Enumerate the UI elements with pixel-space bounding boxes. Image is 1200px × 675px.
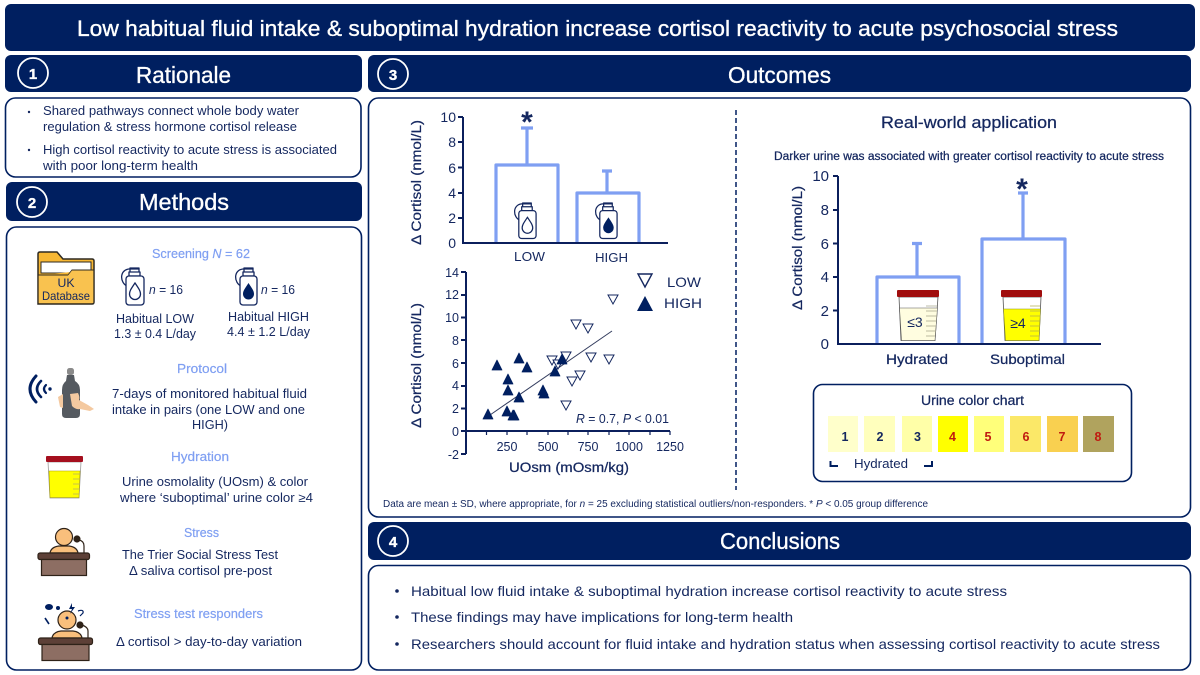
text block: shared pathways: Shared pathways connect whole body water [43, 104, 299, 118]
bar: high [577, 171, 639, 243]
axis title: Δ Cortisol (nmol/L) [408, 120, 424, 245]
icon: person at podium [38, 528, 90, 576]
heading: protocol: Protocol [177, 362, 227, 376]
heading: responders: Stress test responders [134, 607, 263, 621]
icon: UK database folder: Database [42, 289, 90, 303]
text block: responders: Δ cortisol > day-to-day variation [116, 635, 302, 649]
scatter plot: cortisol vs urine osmolality: 250 [497, 440, 517, 454]
significance star: * [1016, 173, 1028, 206]
label: habitual high: 4.4 ± 1.2 L/day [227, 325, 311, 339]
panel: methods heading: 2 [28, 195, 36, 212]
text block: shared pathways [28, 104, 299, 134]
text block: high cortisol reactivity [28, 143, 337, 173]
panel: conclusions heading: Conclusions [720, 528, 840, 554]
label: habitual low [114, 312, 197, 341]
bar chart: cortisol by fluid intake [408, 106, 668, 265]
scatter plot: cortisol vs urine osmolality: 12 [445, 288, 459, 302]
scatter plot: cortisol vs urine osmolality [408, 266, 702, 475]
bar chart: cortisol by hydration [789, 168, 1101, 367]
scatter plot: cortisol vs urine osmolality: 8 [452, 334, 459, 348]
bar chart: cortisol by hydration: 6 [821, 236, 829, 253]
bar chart: cortisol by fluid intake: 8 [448, 134, 456, 150]
swatch numbers: 3 [914, 430, 921, 444]
text block: stress [122, 548, 279, 578]
footnote: Data are mean ± SD, where appropriate, for n = 25 excluding statistical outliers/non-responders. * P < 0.05 group difference [383, 499, 928, 510]
icon: smart bottle with hand [58, 368, 94, 418]
bar: low [496, 128, 558, 243]
panel: outcomes heading [368, 55, 1191, 92]
heading: stress: Stress [184, 526, 219, 540]
category labels: LOW [514, 249, 546, 264]
swatch numbers: 2 [877, 430, 884, 444]
label: n high: n = 16 [261, 283, 295, 297]
scatter plot: cortisol vs urine osmolality: 2 [452, 402, 459, 416]
urine color chart [814, 384, 1132, 482]
text block: high cortisol reactivity: with poor long-term health [42, 159, 198, 173]
swatch numbers: 4 [949, 430, 956, 444]
swatch numbers: 8 [1095, 430, 1102, 444]
subheading: Darker urine was associated with greater cortisol reactivity to acute stress [774, 151, 1164, 163]
panel: rationale [6, 98, 361, 177]
icon: bottle high [596, 203, 617, 238]
category labels [514, 249, 628, 265]
bar: suboptimal [982, 193, 1065, 344]
title: Low habitual fluid intake & suboptimal hydration increase cortisol reactivity to acute psychosocial stress [77, 16, 1118, 41]
icon: stressed person at podium [38, 603, 92, 660]
bar chart: cortisol by hydration: 10 [812, 168, 829, 185]
color swatches [828, 416, 1114, 452]
text block: hydration: Urine osmolality (UOsm) & color [122, 475, 308, 489]
scatter plot: cortisol vs urine osmolality: 1000 [615, 440, 643, 454]
bar chart: cortisol by hydration: 8 [821, 202, 829, 219]
points: low [547, 295, 618, 410]
hydrated bracket: Hydrated [854, 456, 908, 471]
scatter plot: cortisol vs urine osmolality: 4 [452, 379, 459, 393]
category labels [886, 351, 1065, 367]
panel: rationale heading [5, 55, 362, 92]
icon: urine cup suboptimal: ≥4 [1010, 315, 1026, 331]
label: n low: n = 16 [149, 283, 183, 297]
swatch numbers: 6 [1023, 430, 1030, 444]
panel: methods heading [6, 182, 362, 221]
scatter plot: cortisol vs urine osmolality: -2 [448, 448, 459, 462]
axis title: UOsm (mOsm/kg) [509, 459, 629, 475]
text block: protocol: 7-days of monitored habitual fluid [112, 387, 307, 401]
title [5, 4, 1195, 51]
label: habitual low: 1.3 ± 0.4 L/day [114, 327, 197, 341]
heading: real-world application: Real-world application [881, 114, 1057, 132]
chart title: Urine color chart [921, 393, 1024, 408]
icon: UK database folder [38, 252, 94, 304]
bar chart: cortisol by hydration: 0 [821, 336, 829, 353]
heading: screening: Screening N = 62 [152, 247, 250, 261]
icon: bottle low [122, 268, 144, 305]
text block: high cortisol reactivity: High cortisol reactivity to acute stress is associated [43, 143, 337, 157]
panel: methods [6, 227, 362, 670]
text block: stress: The Trier Social Stress Test [122, 548, 279, 562]
conclusion 1: Habitual low fluid intake & suboptimal hydration increase cortisol reactivity to acute stress [411, 583, 1007, 599]
icon: urine cup hydrated [897, 290, 939, 340]
bar chart: cortisol by fluid intake: 10 [440, 109, 456, 125]
scatter plot: cortisol vs urine osmolality: 500 [538, 440, 558, 454]
panel: conclusions heading: 4 [389, 534, 398, 551]
scatter plot: cortisol vs urine osmolality: 6 [452, 357, 459, 371]
legend: LOW [667, 274, 702, 290]
text block: hydration: where ‘suboptimal’ urine color ≥4 [119, 491, 313, 505]
swatch numbers: 5 [985, 430, 992, 444]
axis title: Δ Cortisol (nmol/L) [789, 186, 805, 310]
text block: hydration [119, 475, 313, 505]
panel: conclusions heading [368, 522, 1191, 560]
text block: protocol: HIGH) [192, 418, 228, 432]
statistic: R = 0.7, P < 0.01 [576, 412, 669, 426]
bar chart: cortisol by fluid intake: 6 [448, 160, 456, 176]
bar chart: cortisol by fluid intake: 2 [448, 210, 456, 226]
bar chart: cortisol by fluid intake: 4 [448, 185, 456, 201]
bar: hydrated [877, 243, 959, 344]
swatch numbers: 7 [1059, 430, 1066, 444]
scatter plot: cortisol vs urine osmolality: 1250 [656, 440, 684, 454]
category labels: Suboptimal [990, 351, 1065, 367]
category labels: Hydrated [886, 351, 948, 367]
panel: outcomes [368, 98, 1190, 517]
icon: urine cup suboptimal [1001, 290, 1042, 340]
icon: UK database folder: UK [58, 276, 74, 290]
panel: conclusions [368, 566, 1190, 670]
heading: hydration: Hydration [171, 450, 229, 464]
swatch numbers [842, 430, 1102, 444]
icon: wireless signal [30, 376, 51, 402]
icon: bottle low [515, 203, 536, 238]
text block: protocol [112, 387, 307, 432]
text block: protocol: intake in pairs (one LOW and one [112, 403, 305, 417]
text block: shared pathways: regulation & stress hormone cortisol release [43, 120, 297, 134]
panel: rationale heading: Rationale [136, 62, 231, 88]
scatter plot: cortisol vs urine osmolality: 750 [578, 440, 598, 454]
swatch numbers: 1 [842, 430, 849, 444]
icon: urine cup yellow [46, 456, 83, 498]
hydrated bracket [830, 456, 932, 471]
bar chart: cortisol by hydration: 2 [821, 303, 829, 320]
label: habitual high: Habitual HIGH [228, 310, 309, 324]
panel: outcomes heading: Outcomes [728, 62, 831, 88]
panel: rationale heading: 1 [29, 66, 37, 83]
regression line [490, 331, 612, 415]
significance star: * [521, 106, 533, 139]
label: habitual high [227, 310, 311, 339]
icon: bottle high [236, 268, 257, 305]
panel: methods heading: Methods [139, 189, 229, 215]
points: high [483, 353, 567, 420]
axis title: Δ Cortisol (nmol/L) [408, 303, 424, 428]
scatter plot: cortisol vs urine osmolality: 10 [445, 311, 459, 325]
bar chart: cortisol by fluid intake: 0 [448, 235, 456, 251]
scatter plot: cortisol vs urine osmolality: 14 [445, 266, 459, 280]
scatter plot: cortisol vs urine osmolality: 0 [452, 425, 459, 439]
legend: HIGH [664, 295, 702, 311]
text block: stress: Δ saliva cortisol pre-post [129, 564, 273, 578]
category labels: HIGH [595, 250, 628, 265]
label: habitual low: Habitual LOW [116, 312, 194, 326]
legend [637, 274, 702, 311]
bar chart: cortisol by hydration: 4 [821, 269, 829, 286]
conclusion 2: These findings may have implications for long-term health [411, 609, 793, 625]
conclusion 3: Researchers should account for fluid intake and hydration status when assessing cortisol reactivity to acute stress [411, 636, 1160, 652]
panel: outcomes heading: 3 [389, 67, 397, 84]
icon: urine cup hydrated: ≤3 [907, 314, 923, 330]
